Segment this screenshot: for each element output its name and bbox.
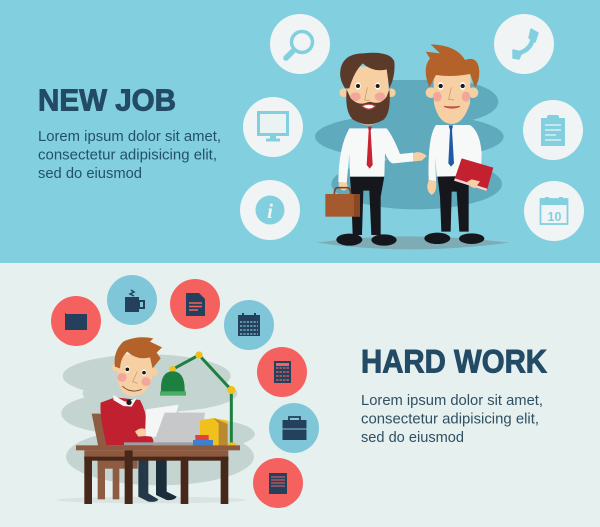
text block: new job: consectetur adipisicing elit, (38, 148, 217, 164)
icon: clipboard (523, 100, 583, 160)
chair (92, 414, 138, 499)
text block: new job: Lorem ipsum dolor sit amet, (38, 129, 221, 145)
briefcase (325, 188, 360, 217)
icon: info: i (267, 199, 273, 223)
icon: coffee cup (107, 275, 157, 325)
icon: inbox tray (253, 458, 303, 508)
man with book (424, 44, 493, 244)
illustration: two businessmen (315, 44, 509, 249)
panel: hard work background (0, 263, 600, 527)
icon: folder (51, 296, 101, 346)
icon: calendar: 10 (548, 210, 561, 224)
text block: hard work: consectetur adipisicing elit, (361, 412, 539, 428)
heading: new job: NEW JOB (38, 84, 176, 118)
person (100, 337, 179, 502)
text block: hard work: Lorem ipsum dolor sit amet, (361, 393, 543, 409)
ground shadow (317, 236, 509, 249)
icon: info (240, 180, 300, 240)
laptop (124, 413, 205, 445)
desk supplies (193, 418, 228, 446)
text block: new job: sed do eiusmod (38, 166, 142, 182)
desk lamp (160, 351, 237, 446)
icon: calendar (524, 181, 584, 241)
text block: hard work: sed do eiusmod (361, 430, 464, 446)
text block: new job (38, 129, 221, 182)
icon: briefcase (269, 403, 319, 453)
illustration: man at desk (57, 337, 255, 504)
icon: phone (494, 14, 554, 74)
background blob (315, 80, 504, 209)
panel: new job background (0, 0, 600, 263)
icon: calendar grid (224, 300, 274, 350)
background blob (61, 354, 255, 485)
heading: hard work: HARD WORK (361, 344, 547, 380)
icon: magnifier (270, 14, 330, 74)
icon: calculator (257, 347, 307, 397)
icon: document (170, 279, 220, 329)
desk (76, 445, 240, 504)
icon: monitor (243, 97, 303, 157)
text block: hard work (361, 393, 543, 446)
bearded man (325, 53, 427, 246)
floor shadow (57, 497, 247, 503)
